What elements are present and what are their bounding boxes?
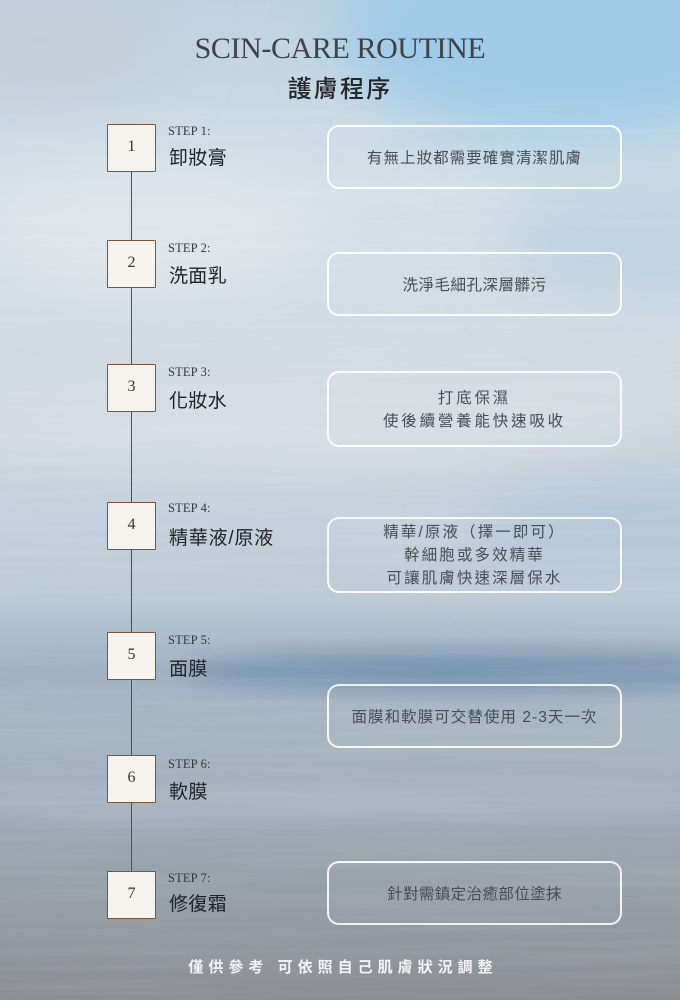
- title: Chinese: 護膚程序: [288, 76, 392, 103]
- step number box 5: 5: [128, 646, 136, 663]
- timeline connector 2-3: [131, 288, 132, 365]
- step 4 description card: 幹細胞或多效精華: [404, 546, 545, 564]
- step 7 name: 修復霜: [169, 894, 227, 915]
- step number box 6: [107, 755, 156, 803]
- step 6 label: STEP 6:: [168, 757, 211, 771]
- step number box 7: [107, 871, 156, 919]
- timeline connector 1-2: [131, 171, 132, 241]
- timeline connector 3-4: [131, 412, 132, 503]
- step 6 name: 軟膜: [169, 782, 208, 803]
- step number box 4: 4: [128, 516, 136, 533]
- step 2 label: STEP 2:: [168, 241, 211, 255]
- step 5 label: STEP 5:: [168, 633, 211, 647]
- step number box 1: [107, 124, 156, 172]
- step 1 name: 卸妝膏: [169, 148, 227, 169]
- step 2 name: 洗面乳: [169, 266, 227, 287]
- step 4 description card: 可讓肌膚快速深層保水: [386, 570, 562, 586]
- step 5-6 description card: 面膜和軟膜可交替使用 2-3天一次: [351, 709, 598, 726]
- step 2 description card: 洗淨毛細孔深層髒污: [402, 277, 546, 294]
- step 4 name: 精華液/原液: [169, 528, 274, 549]
- timeline connector 6-7: [131, 803, 132, 872]
- step number box 6: 6: [128, 769, 136, 786]
- step 3 label: STEP 3:: [168, 365, 211, 379]
- step number box 4: [107, 502, 156, 550]
- timeline connector 4-5: [131, 550, 132, 633]
- step 5-6 description card: [327, 684, 622, 748]
- step 1 label: STEP 1:: [168, 124, 211, 138]
- step 7 label: STEP 7:: [168, 871, 211, 885]
- step 4 description card: 精華/原液（擇一即可）: [383, 524, 566, 540]
- step number box 5: [107, 632, 156, 680]
- footer note: 僅供參考 可依照自己肌膚狀況調整: [188, 959, 498, 976]
- step 3 name: 化妝水: [169, 391, 227, 412]
- step 1 description card: [327, 125, 622, 189]
- step number box 7: 7: [128, 885, 136, 902]
- step 4 description card: [327, 517, 622, 593]
- step 5 name: 面膜: [169, 659, 208, 680]
- step 1 description card: 有無上妝都需要確實清潔肌膚: [367, 150, 582, 167]
- step number box 2: 2: [128, 254, 136, 271]
- step number box 2: [107, 240, 156, 288]
- timeline connector 5-6: [131, 680, 132, 756]
- step number box 3: 3: [128, 378, 136, 395]
- title: English: SCIN-CARE ROUTINE: [195, 32, 485, 65]
- step number box 3: [107, 364, 156, 412]
- step 3 description card: [327, 371, 622, 447]
- step 3 description card: 使後續營養能快速吸收: [383, 413, 566, 430]
- step 7 description card: 針對需鎮定治癒部位塗抹: [387, 886, 562, 903]
- step 4 label: STEP 4:: [168, 501, 211, 515]
- step 2 description card: [327, 252, 622, 316]
- step 7 description card: [327, 861, 622, 925]
- step 3 description card: 打底保濕: [438, 390, 511, 407]
- step number box 1: 1: [128, 138, 136, 155]
